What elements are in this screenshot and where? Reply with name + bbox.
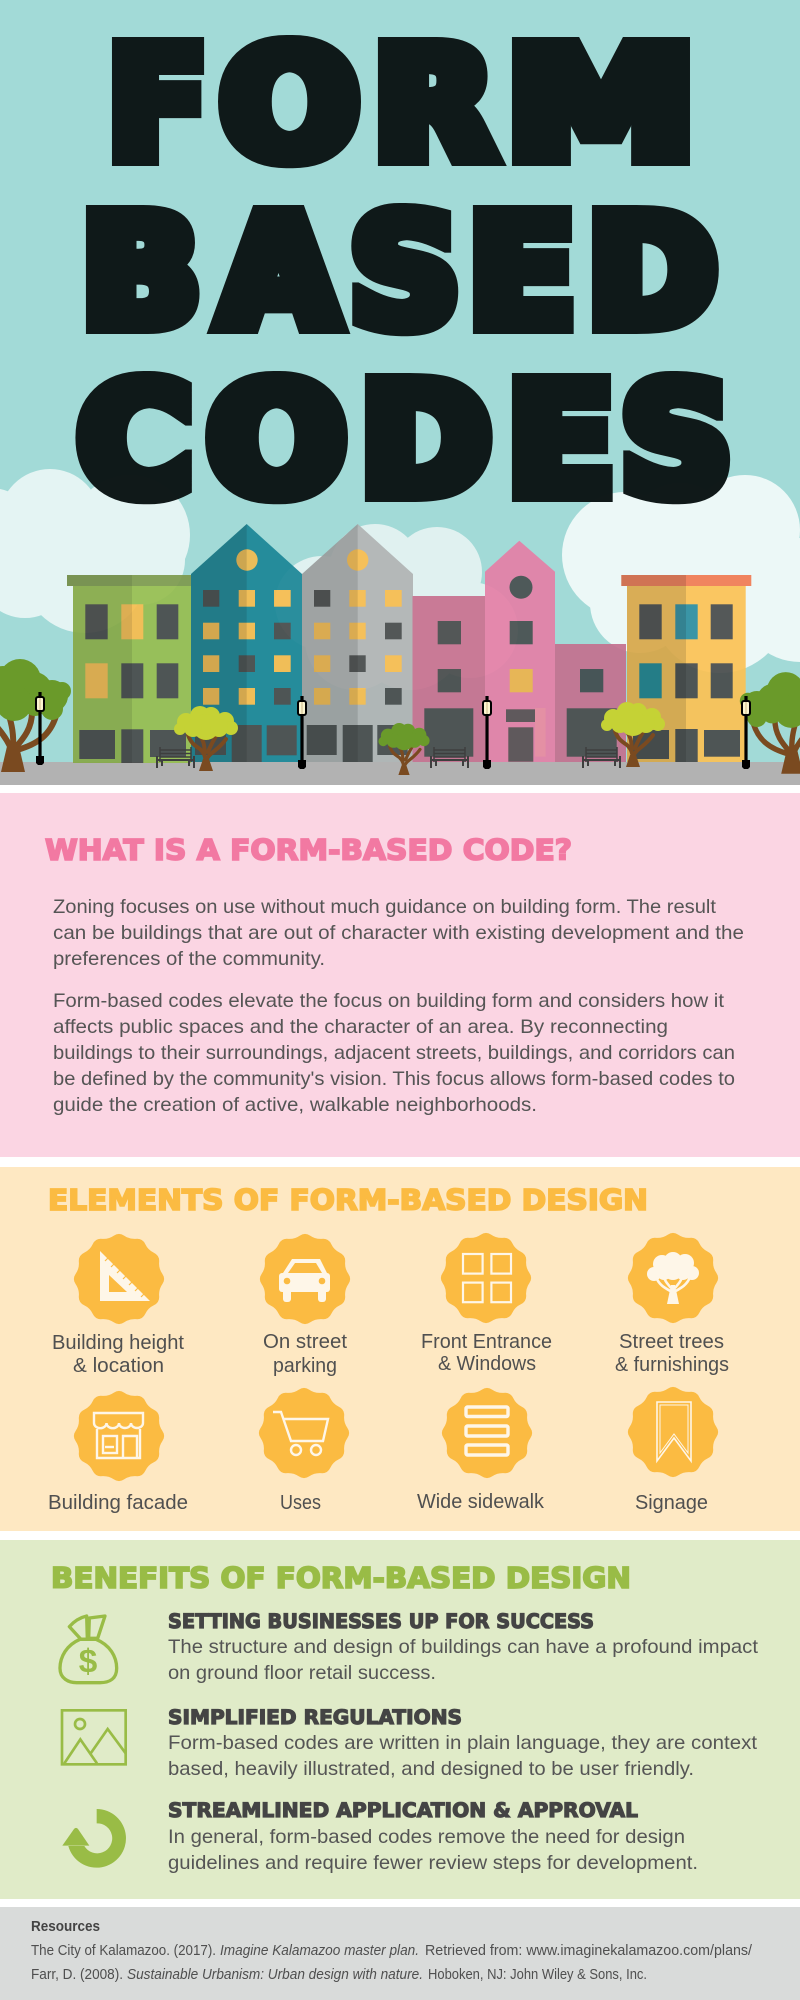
text block: zoning: can be buildings that are out of character with existing development and the	[53, 922, 744, 944]
resources heading: Resources	[31, 1918, 100, 1935]
text block: form-based codes: be defined by the community's vision. This focus allows form-based codes to	[53, 1068, 735, 1090]
benefit 2 text: Form-based codes are written in plain language, they are context	[168, 1732, 758, 1754]
citation 1: Imagine Kalamazoo master plan.	[220, 1943, 419, 1959]
building: yellow	[621, 575, 751, 762]
panel: benefits of form-based design	[0, 1540, 800, 1899]
panel: elements of form-based design	[0, 1167, 800, 1531]
clouds	[0, 469, 800, 690]
street furniture: benches	[157, 747, 620, 768]
heading: elements: ELEMENTS OF FORM-BASED DESIGN	[48, 1184, 648, 1217]
benefit 1 text	[168, 1610, 759, 1684]
text block: form-based codes: guide the creation of active, walkable neighborhoods.	[53, 1094, 537, 1116]
icon: windows	[441, 1233, 531, 1323]
illustration: row of buildings	[67, 524, 751, 763]
text block: form-based codes	[53, 990, 735, 1116]
benefit 1 text: The structure and design of buildings can have a profound impact	[168, 1636, 759, 1658]
panel: what is a form-based code	[0, 793, 800, 1157]
title: A	[220, 183, 337, 363]
heading: what is: WHAT IS A FORM-BASED CODE?	[45, 834, 572, 867]
title	[79, 14, 730, 531]
text block: zoning: preferences of the community.	[53, 948, 325, 970]
benefit 3 text	[168, 1799, 698, 1874]
building: pink tower	[485, 541, 555, 762]
label: uses: Uses	[280, 1492, 321, 1514]
citation 2	[31, 1967, 647, 1983]
icon: signage banner	[628, 1387, 718, 1477]
citation 2: Sustainable Urbanism: Urban design with nature.	[127, 1967, 423, 1983]
title: S	[622, 350, 730, 531]
label: building height	[52, 1332, 184, 1377]
text block: form-based codes: affects public spaces and the character of an area. By reconnecting	[53, 1016, 668, 1038]
label: on street parking: parking	[273, 1355, 337, 1377]
panel: sky background	[0, 0, 800, 785]
label: building height: Building height	[52, 1332, 184, 1354]
benefit 2 text: based, heavily illustrated, and designed to be user friendly.	[168, 1758, 694, 1780]
building: dark pink left	[412, 596, 485, 762]
title: D	[589, 183, 716, 363]
citation 1: Retrieved from: www.imaginekalamazoo.com/plans/	[425, 1943, 753, 1959]
benefit 3 text: In general, form-based codes remove the need for design	[168, 1826, 685, 1848]
title: F	[109, 14, 206, 195]
label: building facade: Building facade	[48, 1492, 188, 1514]
label: front entrance: & Windows	[438, 1353, 536, 1375]
title: D	[362, 351, 490, 531]
icon: circular arrow	[62, 1809, 126, 1868]
title: M	[507, 14, 695, 195]
icon: shopping cart	[259, 1388, 349, 1478]
label: building height: & location	[73, 1355, 164, 1377]
citation 2: Hoboken, NJ: John Wiley & Sons, Inc.	[428, 1967, 647, 1983]
icon: street tree	[628, 1233, 718, 1323]
title: O	[221, 16, 358, 195]
road	[0, 762, 800, 785]
text block: form-based codes: Form-based codes elevate the focus on building form and considers how it	[53, 990, 725, 1012]
trees	[0, 659, 800, 775]
text block: zoning	[53, 896, 744, 970]
benefit 3 text: guidelines and require fewer review steps for development.	[168, 1852, 698, 1874]
building: dark pink right	[555, 644, 626, 762]
benefit 1 text: SETTING BUSINESSES UP FOR SUCCESS	[168, 1610, 594, 1633]
text block: zoning: Zoning focuses on use without much guidance on building form. The result	[53, 896, 717, 918]
title: O	[208, 352, 345, 531]
panel: resources	[0, 1907, 800, 2000]
icon: car	[260, 1234, 350, 1324]
icon: storefront	[74, 1391, 164, 1481]
citation 1	[31, 1943, 753, 1959]
benefit 1 text: on ground floor retail success.	[168, 1662, 436, 1684]
icon: wide sidewalk	[442, 1388, 532, 1478]
icon: building height ruler	[74, 1234, 164, 1324]
benefit 2 text	[168, 1706, 758, 1780]
label: front entrance: Front Entrance	[421, 1331, 552, 1353]
title: E	[509, 351, 613, 531]
icon: money bag: $	[79, 1644, 98, 1681]
icon: money bag	[60, 1616, 117, 1683]
icon: picture	[62, 1710, 126, 1764]
building: teal	[191, 524, 302, 762]
title: B	[83, 183, 199, 363]
citation 1: The City of Kalamazoo. (2017).	[31, 1943, 216, 1959]
title: R	[375, 14, 494, 195]
text block: form-based codes: buildings to their surroundings, adjacent streets, buildings, and corridors can	[53, 1042, 735, 1064]
street lamps	[36, 692, 750, 769]
label: on street parking: On street	[263, 1331, 347, 1353]
label: street trees	[615, 1331, 729, 1376]
label: street trees: Street trees	[619, 1331, 724, 1353]
benefit 2 text: SIMPLIFIED REGULATIONS	[168, 1706, 462, 1729]
citation 2: Farr, D. (2008).	[31, 1967, 123, 1983]
benefit 3 text: STREAMLINED APPLICATION & APPROVAL	[168, 1799, 638, 1822]
label: front entrance	[421, 1331, 552, 1375]
title: S	[351, 182, 458, 363]
label: on street parking	[263, 1331, 347, 1377]
building: grey	[302, 524, 413, 762]
title: C	[79, 351, 191, 531]
building: green	[67, 575, 197, 763]
label: street trees: & furnishings	[615, 1354, 729, 1376]
heading: benefits: BENEFITS OF FORM-BASED DESIGN	[51, 1562, 631, 1595]
label: signage: Signage	[635, 1492, 708, 1514]
title: E	[470, 183, 574, 363]
label: wide sidewalk: Wide sidewalk	[417, 1491, 545, 1513]
